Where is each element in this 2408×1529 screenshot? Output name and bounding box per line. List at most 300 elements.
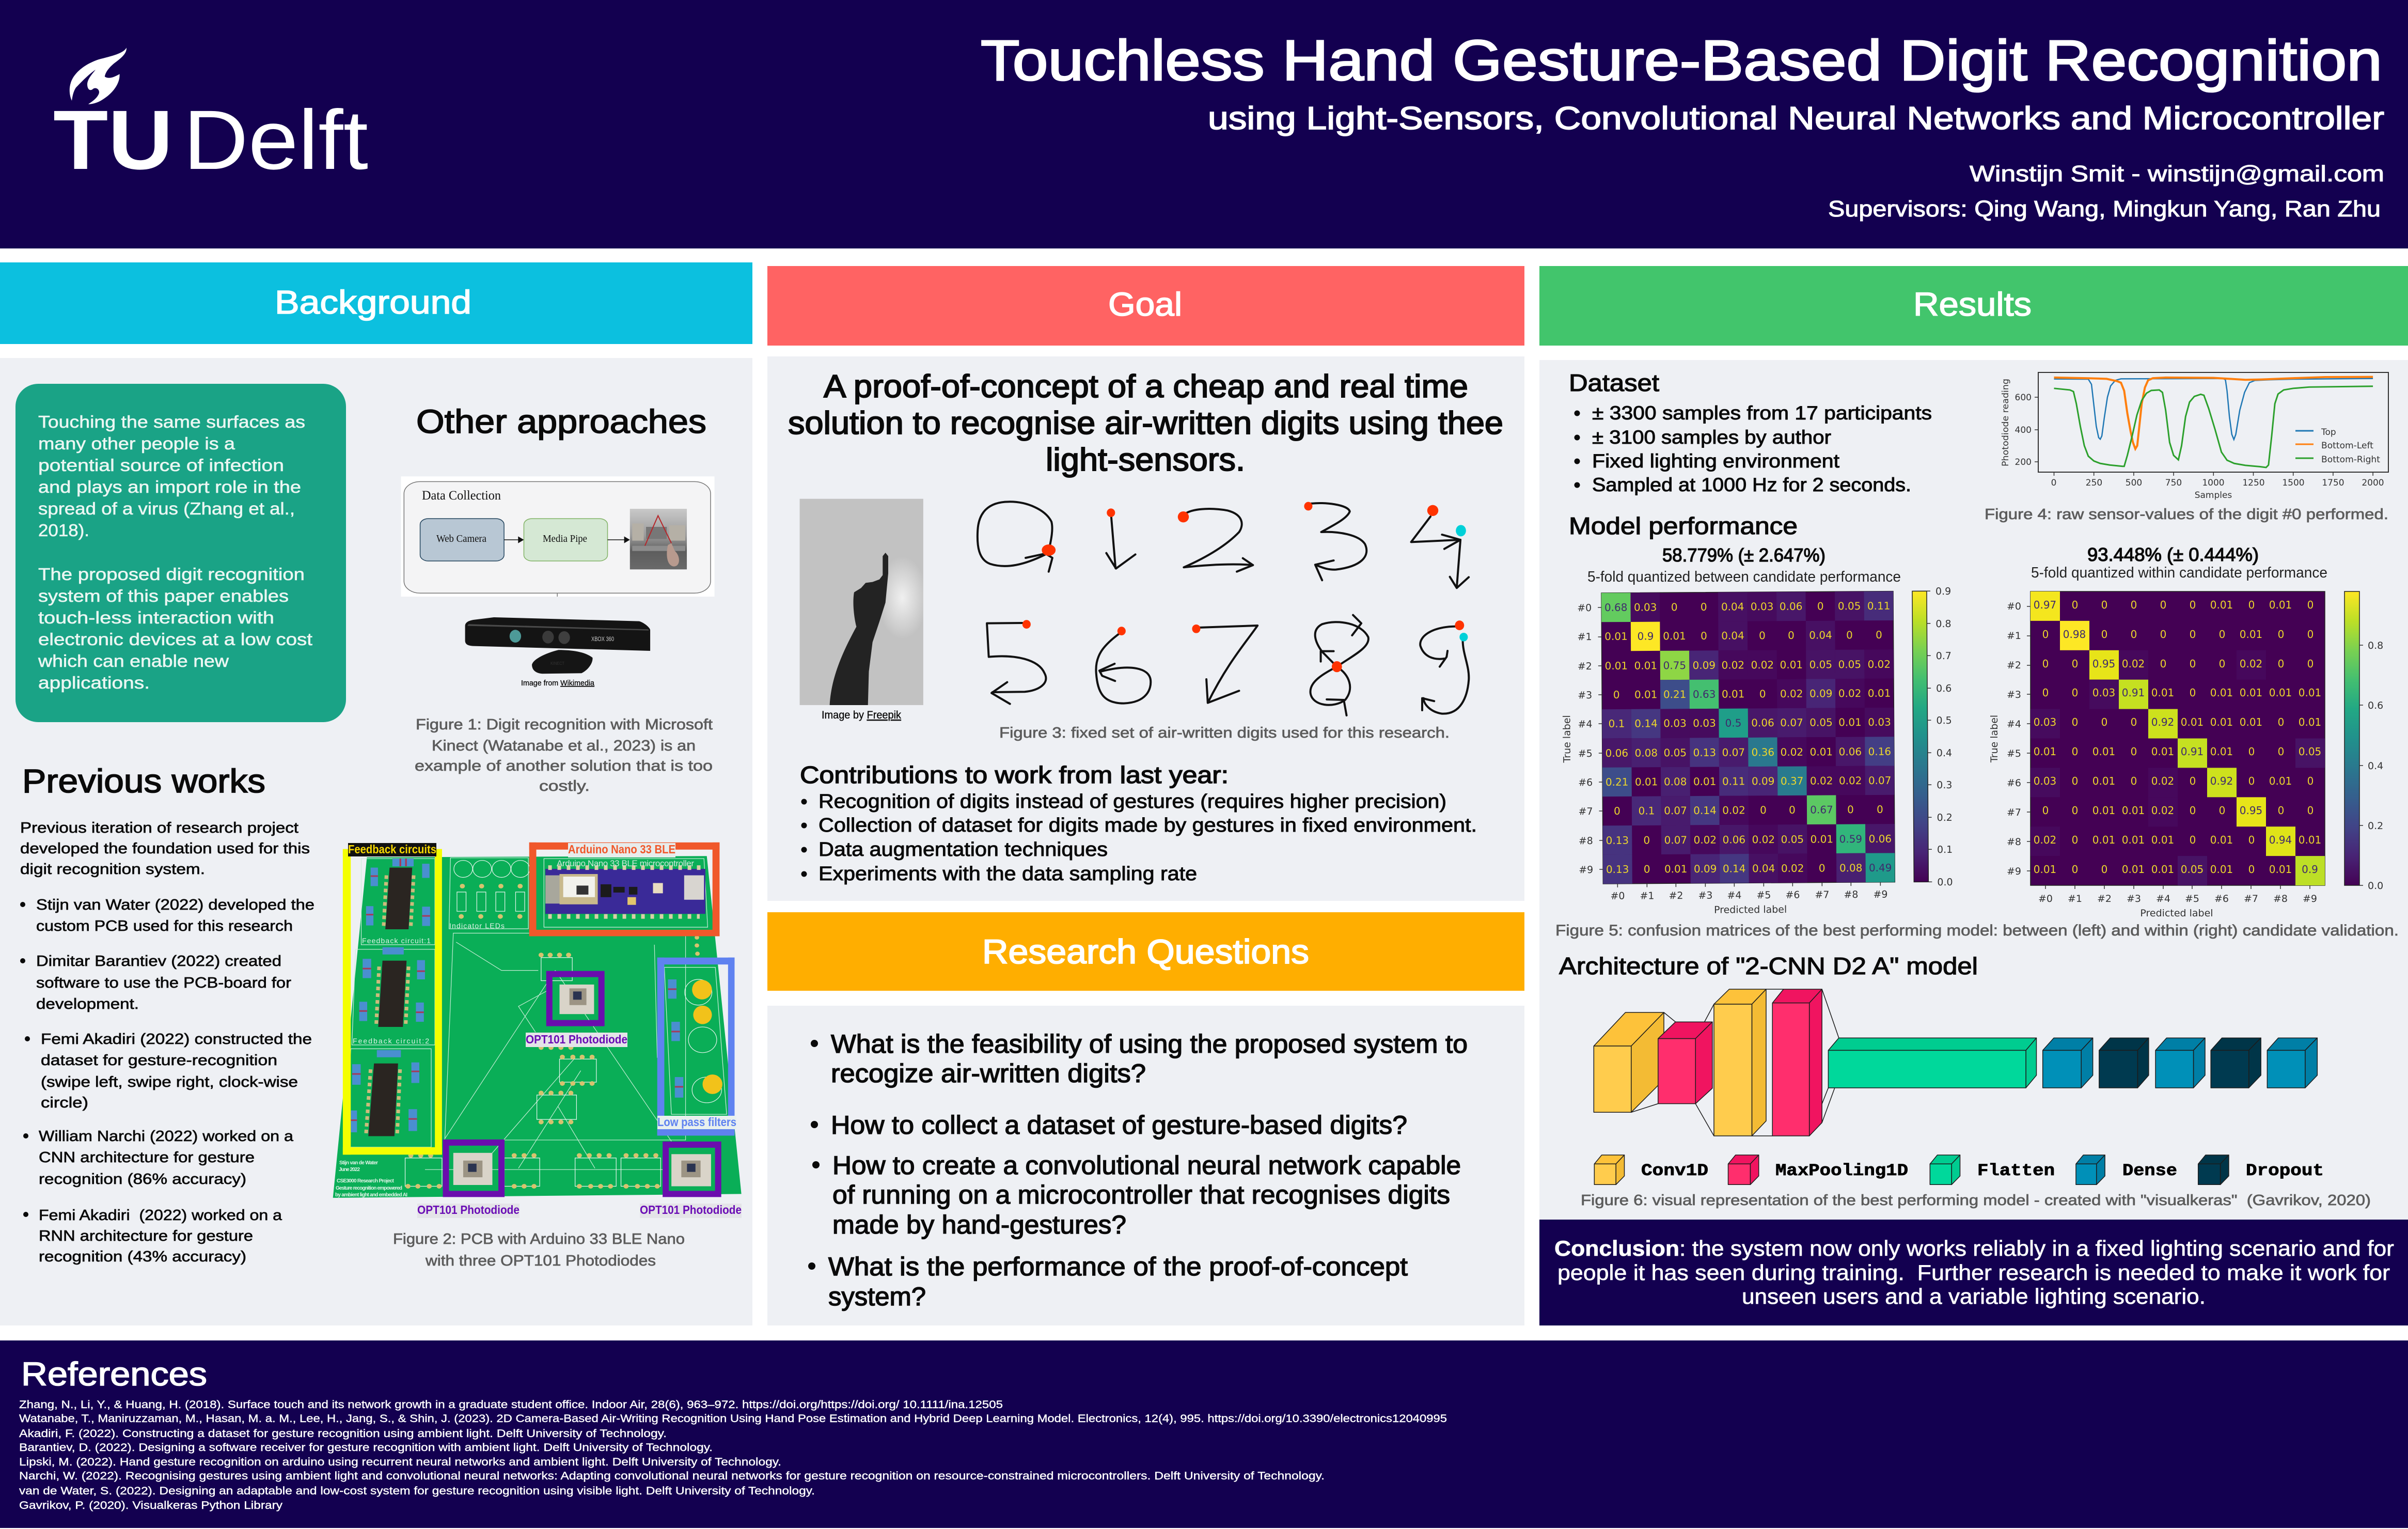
- matrix cell values: 0.09: [1692, 659, 1715, 672]
- matrix cell values: 0: [2248, 775, 2255, 787]
- colorbar: 0.7: [1936, 650, 1951, 662]
- question 3: made by hand-gestures?: [832, 1210, 1126, 1239]
- matrix cell values: 0.91: [2181, 745, 2204, 758]
- question 4: system?: [828, 1282, 926, 1311]
- panel: research questions: [767, 1006, 1524, 1325]
- matrix cell values: 0: [2278, 628, 2284, 641]
- matrix cell values: 0.06: [1780, 600, 1802, 613]
- matrix cell values: 0.05: [2299, 745, 2321, 758]
- matrix cell values: 0.06: [1838, 745, 1862, 758]
- matrix cell values: 0.02: [2034, 834, 2056, 846]
- matrix row labels: #2: [2007, 660, 2021, 671]
- matrix row labels: #6: [2007, 777, 2021, 789]
- list: previous works: RNN architecture for gesture: [39, 1228, 253, 1244]
- matrix column labels: #6: [2214, 893, 2229, 904]
- matrix cell values: 0: [2278, 716, 2284, 728]
- figure 6 caption: Figure 6: visual representation of the best performing model - created with "visualkeras" (Gavrikov, 2020): [1581, 1192, 2371, 1209]
- matrix column labels: #1: [1640, 890, 1655, 902]
- matrix cell values: 0.09: [1694, 863, 1717, 875]
- architecture legend labels: Flatten: [1977, 1161, 2055, 1180]
- matrix cell values: 0: [2131, 599, 2137, 611]
- question 3: of running on a microcontroller that recognises digits: [832, 1180, 1450, 1209]
- heading: architecture: Architecture of "2-CNN D2 A" model: [1559, 953, 1978, 979]
- metric: within candidate accuracy: [2031, 544, 2327, 581]
- matrix cell values: 0: [2160, 599, 2166, 611]
- matrix cell values: 0.01: [2240, 628, 2262, 641]
- matrix cell values: 0.13: [1606, 863, 1629, 876]
- matrix cell values: 0: [1789, 804, 1796, 816]
- matrix cell values: 0: [1759, 688, 1766, 700]
- layer: Dense: [2043, 1038, 2093, 1088]
- list: previous works: [20, 897, 314, 1265]
- chart y tick labels: 600: [2015, 393, 2032, 403]
- matrix row labels: #9: [1579, 864, 1593, 876]
- figure 2: annotated PCB: OPT101 Photodiode: [417, 1203, 520, 1216]
- chart x tick labels: 500: [2126, 478, 2142, 488]
- image credit: wikimedia: Image from Wikimedia: [521, 679, 595, 688]
- colorbar: 0.8: [2368, 640, 2383, 651]
- matrix cell values: 0.02: [2122, 658, 2145, 670]
- metric: within candidate accuracy: 93.448% (± 0.444%): [2087, 544, 2259, 565]
- panel: goal: [767, 356, 1524, 901]
- list: previous works: Stijn van Water (2022) developed the: [36, 897, 314, 913]
- question 4: [808, 1252, 1408, 1311]
- matrix cell values: 0.01: [1722, 688, 1745, 700]
- list: previous works: dataset for gesture-recognition: [41, 1052, 277, 1069]
- matrix cell values: 0.06: [1606, 747, 1628, 759]
- matrix cell values: 0: [2248, 745, 2255, 758]
- matrix cell values: 0: [2160, 658, 2166, 670]
- matrix cell values: 0: [2072, 834, 2078, 846]
- matrix cell values: 0.03: [2034, 716, 2056, 728]
- question 2: How to collect a dataset of gesture-based digits?: [831, 1111, 1407, 1140]
- matrix cell values: 0: [2072, 658, 2078, 670]
- matrix cell values: 0: [2042, 658, 2049, 670]
- matrix cell values: 0.01: [2151, 745, 2174, 758]
- matrix cell values: 0: [1876, 629, 1882, 641]
- chart x tick labels: 1000: [2202, 478, 2225, 488]
- references list: Lipski, M. (2022). Hand gesture recognition on arduino using recurrent neural networks and ambient light. Delft University of Technology.: [19, 1456, 781, 1468]
- y axis title: True label: [1561, 715, 1573, 763]
- matrix cell values: 0.01: [2269, 863, 2292, 876]
- matrix cell values: 0: [2042, 628, 2049, 641]
- heading: previous works: Previous works: [22, 762, 265, 800]
- heading: other approaches: Other approaches: [416, 403, 706, 440]
- figure 2: annotated PCB: Stijn van de Water: [339, 1160, 378, 1166]
- references list: Narchi, W. (2022). Recognising gestures using ambient light and convolutional neural networks: Adapting convolutional neural networks for gesture recognition on resource-constrained microcontrollers. Delft University of Technology.: [19, 1470, 1325, 1482]
- digit 2: [1178, 509, 1253, 572]
- figure 1 caption: example of another solution that is too: [415, 758, 713, 774]
- matrix cell values: 0.21: [1663, 688, 1687, 700]
- matrix cell values: 0.04: [1809, 629, 1832, 642]
- matrix column labels: #7: [1815, 889, 1830, 901]
- colorbar: 0.9: [1935, 586, 1951, 597]
- matrix cell values: 0: [2219, 804, 2225, 817]
- conclusion: [1539, 1220, 2408, 1325]
- matrix cell values: 0.05: [1809, 716, 1833, 729]
- matrix column labels: #8: [1844, 889, 1859, 900]
- list: previous works: (swipe left, swipe right, clock-wise: [41, 1074, 298, 1090]
- colorbar: 0.1: [1937, 844, 1953, 855]
- matrix cell values: 0.02: [1838, 687, 1861, 699]
- heading bar: Results: Results: [1913, 286, 2032, 323]
- matrix cell values: 0: [2131, 775, 2137, 787]
- matrix cell values: 0.01: [2122, 863, 2145, 876]
- matrix column labels: #4: [2156, 893, 2170, 904]
- matrix cell values: 0.01: [2151, 687, 2174, 699]
- matrix cell values: 0.13: [1606, 834, 1629, 847]
- matrix cell values: 0.01: [2151, 863, 2174, 876]
- chart x tick labels: [2051, 478, 2384, 488]
- architecture legend labels: Dropout: [2246, 1161, 2324, 1180]
- matrix cell values: 0: [2219, 628, 2225, 641]
- chart x tick labels: 1500: [2282, 478, 2305, 488]
- figure 1: data collection diagram: [401, 476, 715, 597]
- layer: Dense: [2267, 1038, 2317, 1088]
- list: dataset facts: [1574, 402, 1932, 495]
- matrix cell values: 0.49: [1869, 862, 1892, 874]
- matrix cell values: 0.04: [1752, 862, 1775, 875]
- matrix cell values: 0.03: [1751, 600, 1773, 613]
- matrix cell values: 0.01: [2034, 863, 2056, 876]
- matrix cell values: 0.01: [2181, 716, 2204, 728]
- callout: motivation: Touching the same surfaces as: [38, 412, 305, 431]
- matrix cell values: 0.02: [1752, 833, 1775, 846]
- matrix cell values: 0.01: [1663, 630, 1686, 642]
- matrix cell values: 0.91: [2122, 687, 2145, 699]
- matrix cell values: 0: [2248, 834, 2255, 846]
- conclusion: unseen users and a variable lighting scenario.: [1742, 1284, 2206, 1308]
- panel: results: [1539, 360, 2408, 1220]
- matrix cell values: 0.97: [2034, 599, 2056, 611]
- matrix cell values: 0.21: [1606, 776, 1629, 788]
- matrix cell values: 0: [1819, 862, 1825, 875]
- matrix cell values: 0: [1847, 803, 1854, 816]
- question 4: What is the performance of the proof-of-concept: [828, 1252, 1408, 1281]
- heading bar: Results: [1539, 266, 2408, 346]
- figure 2: annotated PCB: June 2022: [339, 1167, 360, 1173]
- list: previous works: development.: [36, 996, 139, 1012]
- matrix cell values: 0: [2101, 863, 2107, 876]
- heading: model performance: Model performance: [1569, 512, 1798, 539]
- colorbar: 0.2: [2368, 820, 2383, 832]
- matrix cell values: 0.1: [1609, 717, 1625, 730]
- figure 2: annotated PCB: CSE3000 Research Project: [337, 1178, 395, 1184]
- matrix cell values: 0: [2072, 745, 2078, 758]
- matrix cell values: 0: [2278, 804, 2284, 817]
- list: previous works: CNN architecture for gesture: [39, 1149, 255, 1166]
- matrix cell values: 0.01: [2210, 687, 2233, 699]
- matrix cell values: 0.02: [1694, 834, 1717, 846]
- matrix column labels: #2: [1669, 890, 1683, 901]
- heading bar: Research Questions: [767, 912, 1524, 991]
- figure 1: data collection diagram: Web Camera: [436, 533, 486, 544]
- matrix cell values: 0: [2042, 804, 2049, 817]
- matrix cell values: 0: [2278, 745, 2284, 758]
- heading bar: Goal: Goal: [1108, 286, 1182, 323]
- figure 2: annotated PCB: OPT101 Photodiode: [640, 1203, 742, 1216]
- references list: van de Water, S. (2022). Designing an adaptable and low-cost system for gesture recognition using visible light. Delft University of Technology.: [19, 1485, 815, 1497]
- matrix cell values: 0: [1846, 629, 1853, 641]
- matrix cell values: 0: [2072, 863, 2078, 876]
- matrix cell values: 0: [2160, 628, 2166, 641]
- subtitle: using Light-Sensors, Convolutional Neural Networks and Microcontroller: [1208, 101, 2384, 136]
- layer: Conv1D: [1594, 1012, 1664, 1112]
- matrix column labels: #0: [1610, 891, 1625, 902]
- matrix cell values: 0.14: [1634, 717, 1658, 730]
- chart legend: Bottom-Right: [2321, 455, 2380, 465]
- matrix cell values: 0.01: [1868, 687, 1891, 699]
- chart x tick labels: 750: [2165, 478, 2182, 488]
- figure 6: network architecture diagram: [1594, 989, 2317, 1184]
- matrix cell values: 0.59: [1839, 833, 1862, 845]
- matrix cell values: 0.11: [1722, 775, 1745, 788]
- matrix row labels: #3: [2007, 689, 2021, 700]
- matrix cell values: 0.01: [2034, 745, 2056, 758]
- matrix column labels: #6: [1785, 890, 1800, 901]
- matrix cell values: 0.95: [2092, 658, 2115, 670]
- matrix row labels: [1577, 602, 1593, 876]
- list: previous works: recognition (86% accuracy): [39, 1171, 246, 1188]
- matrix cell values: 0.05: [1781, 833, 1804, 846]
- matrix cell values: 0: [1701, 601, 1707, 613]
- matrix cell values: 0.05: [1664, 746, 1687, 759]
- x axis title: Predicted label: [2140, 908, 2213, 919]
- digit 5: [987, 620, 1046, 704]
- matrix cell values: 0: [1643, 834, 1650, 847]
- chart: within candidate confusion matrix: [1989, 591, 2383, 919]
- matrix column labels: #1: [2068, 893, 2082, 904]
- figure 2: annotated PCB: by ambient light and embedded AI: [335, 1192, 407, 1198]
- matrix cell values: 0: [2131, 628, 2137, 641]
- text: previous iteration: [20, 820, 310, 878]
- digit 4: [1411, 505, 1469, 588]
- question 1: What is the feasibility of using the proposed system to: [831, 1029, 1468, 1058]
- figure 1 caption: Figure 1: Digit recognition with Microsoft: [416, 716, 713, 733]
- list: previous works: circle): [41, 1095, 88, 1111]
- icon: flame: [70, 48, 127, 104]
- matrix cell values: 0: [1817, 600, 1824, 613]
- matrix cell values: 0.16: [1868, 745, 1891, 758]
- layer: Dropout: [2099, 1038, 2149, 1088]
- colorbar: 0.6: [2368, 700, 2383, 711]
- legend swatches: [1594, 1155, 2229, 1184]
- matrix cell values: 0: [2072, 687, 2078, 699]
- matrix cells: [2031, 591, 2325, 885]
- title: Touchless Hand Gesture-Based Digit Recognition: [981, 29, 2382, 92]
- figure 3 caption: Figure 3: fixed set of air-written digits used for this research.: [999, 725, 1450, 741]
- matrix column labels: #0: [2038, 893, 2053, 904]
- matrix cell values: 0.01: [2122, 834, 2145, 846]
- callout: motivation: The proposed digit recognition: [38, 565, 305, 584]
- matrix cell values: 0.07: [1664, 834, 1687, 846]
- digit 7: [1192, 625, 1257, 703]
- figure 2 caption: Figure 2: PCB with Arduino 33 BLE Nano: [393, 1231, 685, 1247]
- chart y tick labels: 400: [2015, 425, 2032, 435]
- figure 2 caption: [393, 1231, 685, 1269]
- list: previous works: recognition (43% accuracy): [39, 1249, 246, 1265]
- matrix cell values: 0: [2072, 716, 2078, 728]
- matrix cell values: 0: [2307, 599, 2313, 611]
- matrix cell values: 0.01: [1634, 659, 1657, 672]
- figure 2: annotated PCB: [333, 842, 742, 1218]
- matrix cell values: 0.01: [1664, 863, 1688, 875]
- text: previous iteration: developed the foundation used for this: [20, 840, 310, 857]
- digit 1: [1106, 508, 1136, 569]
- matrix cell values: 0: [1671, 601, 1678, 613]
- figure 2: annotated PCB: Low pass filters: [657, 1115, 736, 1129]
- metric: within candidate accuracy: 5-fold quantized within candidate performance: [2031, 565, 2327, 581]
- text: previous iteration: digit recognition system.: [20, 861, 205, 878]
- matrix cell values: [2034, 599, 2321, 876]
- matrix cell values: 0.08: [1839, 862, 1863, 874]
- matrix cell values: 0.68: [1604, 601, 1628, 614]
- list: contributions: Collection of dataset for digits made by gestures in fixed environment.: [819, 815, 1477, 836]
- matrix row labels: #5: [1578, 748, 1593, 759]
- figure 4 caption: Figure 4: raw sensor-values of the digit #0 performed.: [1985, 506, 2388, 523]
- figure 2: annotated PCB: Feedback circuit:2: [353, 1037, 429, 1045]
- figure 1: data collection diagram: Media Pipe: [543, 533, 587, 544]
- matrix cell values: 0.01: [2151, 834, 2174, 846]
- photo: pointing hand silhouette: [800, 499, 923, 705]
- matrix cell values: 0.01: [2299, 687, 2321, 699]
- matrix row labels: #7: [1578, 806, 1593, 817]
- list: contributions: [801, 791, 1477, 885]
- text: previous iteration: Previous iteration of research project: [20, 820, 298, 836]
- list: contributions: Experiments with the data sampling rate: [819, 863, 1197, 885]
- matrix cell values: 0.92: [2210, 775, 2233, 787]
- matrix row labels: [2007, 601, 2021, 877]
- heading: contributions: Contributions to work from last year:: [800, 761, 1229, 788]
- references list: Zhang, N., Li, Y., & Huang, H. (2018). Surface touch and its network growth in a graduate student office. Indoor Air, 28(6), 963–972. https://doi.org/https://doi.org/ 10.1111/ina.12505: [19, 1399, 1003, 1411]
- matrix cell values: 0.03: [2092, 687, 2115, 699]
- list: previous works: William Narchi (2022) worked on a: [39, 1128, 294, 1145]
- list: dataset facts: ± 3100 samples by author: [1592, 427, 1831, 448]
- matrix cell values: 0.14: [1723, 862, 1746, 875]
- list: previous works: custom PCB used for this research: [36, 918, 293, 934]
- matrix cell values: 0: [2101, 628, 2107, 641]
- heading bar: Goal: [767, 266, 1524, 346]
- layer: MaxPooling1D: [1658, 1022, 1712, 1104]
- figure 2: annotated PCB: Indicator LEDs: [449, 922, 505, 930]
- matrix cell values: 0.36: [1751, 746, 1774, 758]
- colorbar: 0.8: [1935, 618, 1951, 630]
- matrix cell values: 0.05: [1838, 658, 1861, 670]
- matrix cell values: 0.14: [1693, 804, 1717, 817]
- callout: motivation: and plays an import role in the: [38, 477, 301, 496]
- matrix cell values: 0.02: [1751, 659, 1774, 671]
- chart x tick labels: 0: [2051, 478, 2056, 488]
- list: contributions: Recognition of digits instead of gestures (requires higher precision): [819, 791, 1446, 813]
- matrix cell values: 0.02: [1781, 862, 1804, 875]
- conclusion: Conclusion : the system now only works reliably in a fixed lighting scenario and for: [1554, 1236, 2394, 1260]
- matrix cell values: 0.08: [1635, 746, 1658, 759]
- matrix cell values: 0: [2307, 658, 2313, 670]
- matrix cell values: 0.01: [1604, 660, 1628, 672]
- list: previous works: Femi Akadiri (2022) worked on a: [39, 1207, 282, 1224]
- matrix cell values: 0: [1644, 863, 1650, 876]
- matrix cell values: 0.01: [1693, 775, 1717, 788]
- matrix column labels: #3: [1698, 890, 1713, 901]
- figure 2: annotated PCB: Feedback circuits: [348, 842, 436, 856]
- icon: kinect sensor: XBOX 360: [591, 635, 614, 643]
- figure 2 caption: with three OPT101 Photodiodes: [425, 1253, 656, 1269]
- chart: between candidate confusion matrix: [1561, 586, 1953, 916]
- matrix cell values: 0.02: [2240, 658, 2262, 670]
- matrix column labels: #9: [1873, 889, 1888, 900]
- matrix cell values: 0.98: [2063, 628, 2086, 641]
- colorbar: 0.0: [2368, 880, 2383, 892]
- question 1: [811, 1029, 1468, 1088]
- matrix cell values: 0.06: [1751, 716, 1774, 729]
- matrix row labels: #1: [1577, 631, 1592, 643]
- matrix cell values: 0: [2042, 687, 2049, 699]
- callout: motivation: applications.: [38, 673, 150, 692]
- matrix column labels: #2: [2097, 893, 2112, 904]
- matrix cell values: 0.07: [1780, 716, 1803, 729]
- matrix cell values: 0: [2190, 775, 2196, 787]
- matrix cell values: 0.95: [2240, 804, 2262, 817]
- digit 9: [1420, 620, 1469, 714]
- callout: motivation: potential source of infection: [38, 456, 284, 475]
- matrix cell values: 0.03: [1693, 717, 1716, 729]
- matrix row labels: #5: [2007, 748, 2021, 759]
- colorbar: 0.4: [2368, 760, 2383, 772]
- matrix cell values: 0.11: [1867, 600, 1890, 612]
- matrix cell values: 0: [2248, 863, 2255, 876]
- matrix cell values: 0: [2190, 599, 2196, 611]
- list: dataset facts: Fixed lighting environment: [1592, 450, 1840, 472]
- supervisors: Supervisors: Qing Wang, Mingkun Yang, Ran Zhu: [1828, 196, 2381, 222]
- matrix column labels: #4: [1727, 890, 1742, 901]
- layer: MaxPooling1D: [1772, 989, 1822, 1136]
- matrix cell values: 0.07: [1868, 774, 1891, 787]
- references list: Watanabe, T., Maniruzzaman, M., Hasan, M. a. M., Lee, H., Jang, S., & Shin, J. (2023). 2D Camera-Based Air-Writing Recognition Using Hand Pose Estimation and Hybrid Deep Learning Model. Electronics, 12(4), 995. https://doi.org/10.3390/electronics12040995: [19, 1413, 1447, 1425]
- matrix cell values: 0.01: [2269, 687, 2292, 699]
- question 3: How to create a convolutional neural network capable: [832, 1151, 1461, 1180]
- matrix cell values: 0.05: [1838, 600, 1861, 612]
- figure 2: annotated PCB: Arduino Nano 33 BLE: [568, 842, 675, 856]
- line: bottom-right sensor: [2054, 386, 2373, 467]
- matrix cell values: 0.01: [2210, 834, 2233, 846]
- goal statement: A proof-of-concept of a cheap and real time: [824, 369, 1468, 404]
- matrix cell values: 0: [2072, 775, 2078, 787]
- figure 3: air-written digits: [978, 502, 1469, 715]
- metric: between candidate accuracy: 5-fold quantized between candidate performance: [1587, 569, 1901, 585]
- layer: Flatten: [1828, 1038, 2036, 1088]
- matrix column labels: [1610, 889, 1888, 902]
- matrix column labels: #5: [1756, 890, 1771, 901]
- logo wordmark Delft: Delft: [183, 92, 368, 187]
- matrix cell values: 0.01: [2210, 716, 2233, 728]
- matrix cell values: 0: [2307, 628, 2313, 641]
- matrix cell values: 0: [1877, 803, 1883, 816]
- matrix cell values: 0: [2190, 687, 2196, 699]
- matrix cell values: 0: [1701, 630, 1707, 642]
- matrix cell values: 0.01: [2092, 775, 2115, 787]
- matrix column labels: #9: [2303, 893, 2317, 904]
- digit 3: [1304, 502, 1366, 580]
- matrix cell values: 0.9: [2302, 863, 2318, 876]
- conclusion: people it has seen during training. Further research is needed to make it work for: [1557, 1260, 2390, 1285]
- list: dataset facts: Sampled at 1000 Hz for 2 seconds.: [1592, 474, 1911, 495]
- matrix cell values: 0.05: [2181, 863, 2204, 876]
- question 1: recogize air-written digits?: [831, 1059, 1146, 1088]
- references list: Gavrikov, P. (2020). Visualkeras Python Library: [19, 1500, 283, 1511]
- heading bar: Background: Background: [275, 284, 471, 321]
- matrix cell values: 0.03: [1868, 716, 1891, 728]
- callout: motivation: touch-less interaction with: [38, 608, 274, 627]
